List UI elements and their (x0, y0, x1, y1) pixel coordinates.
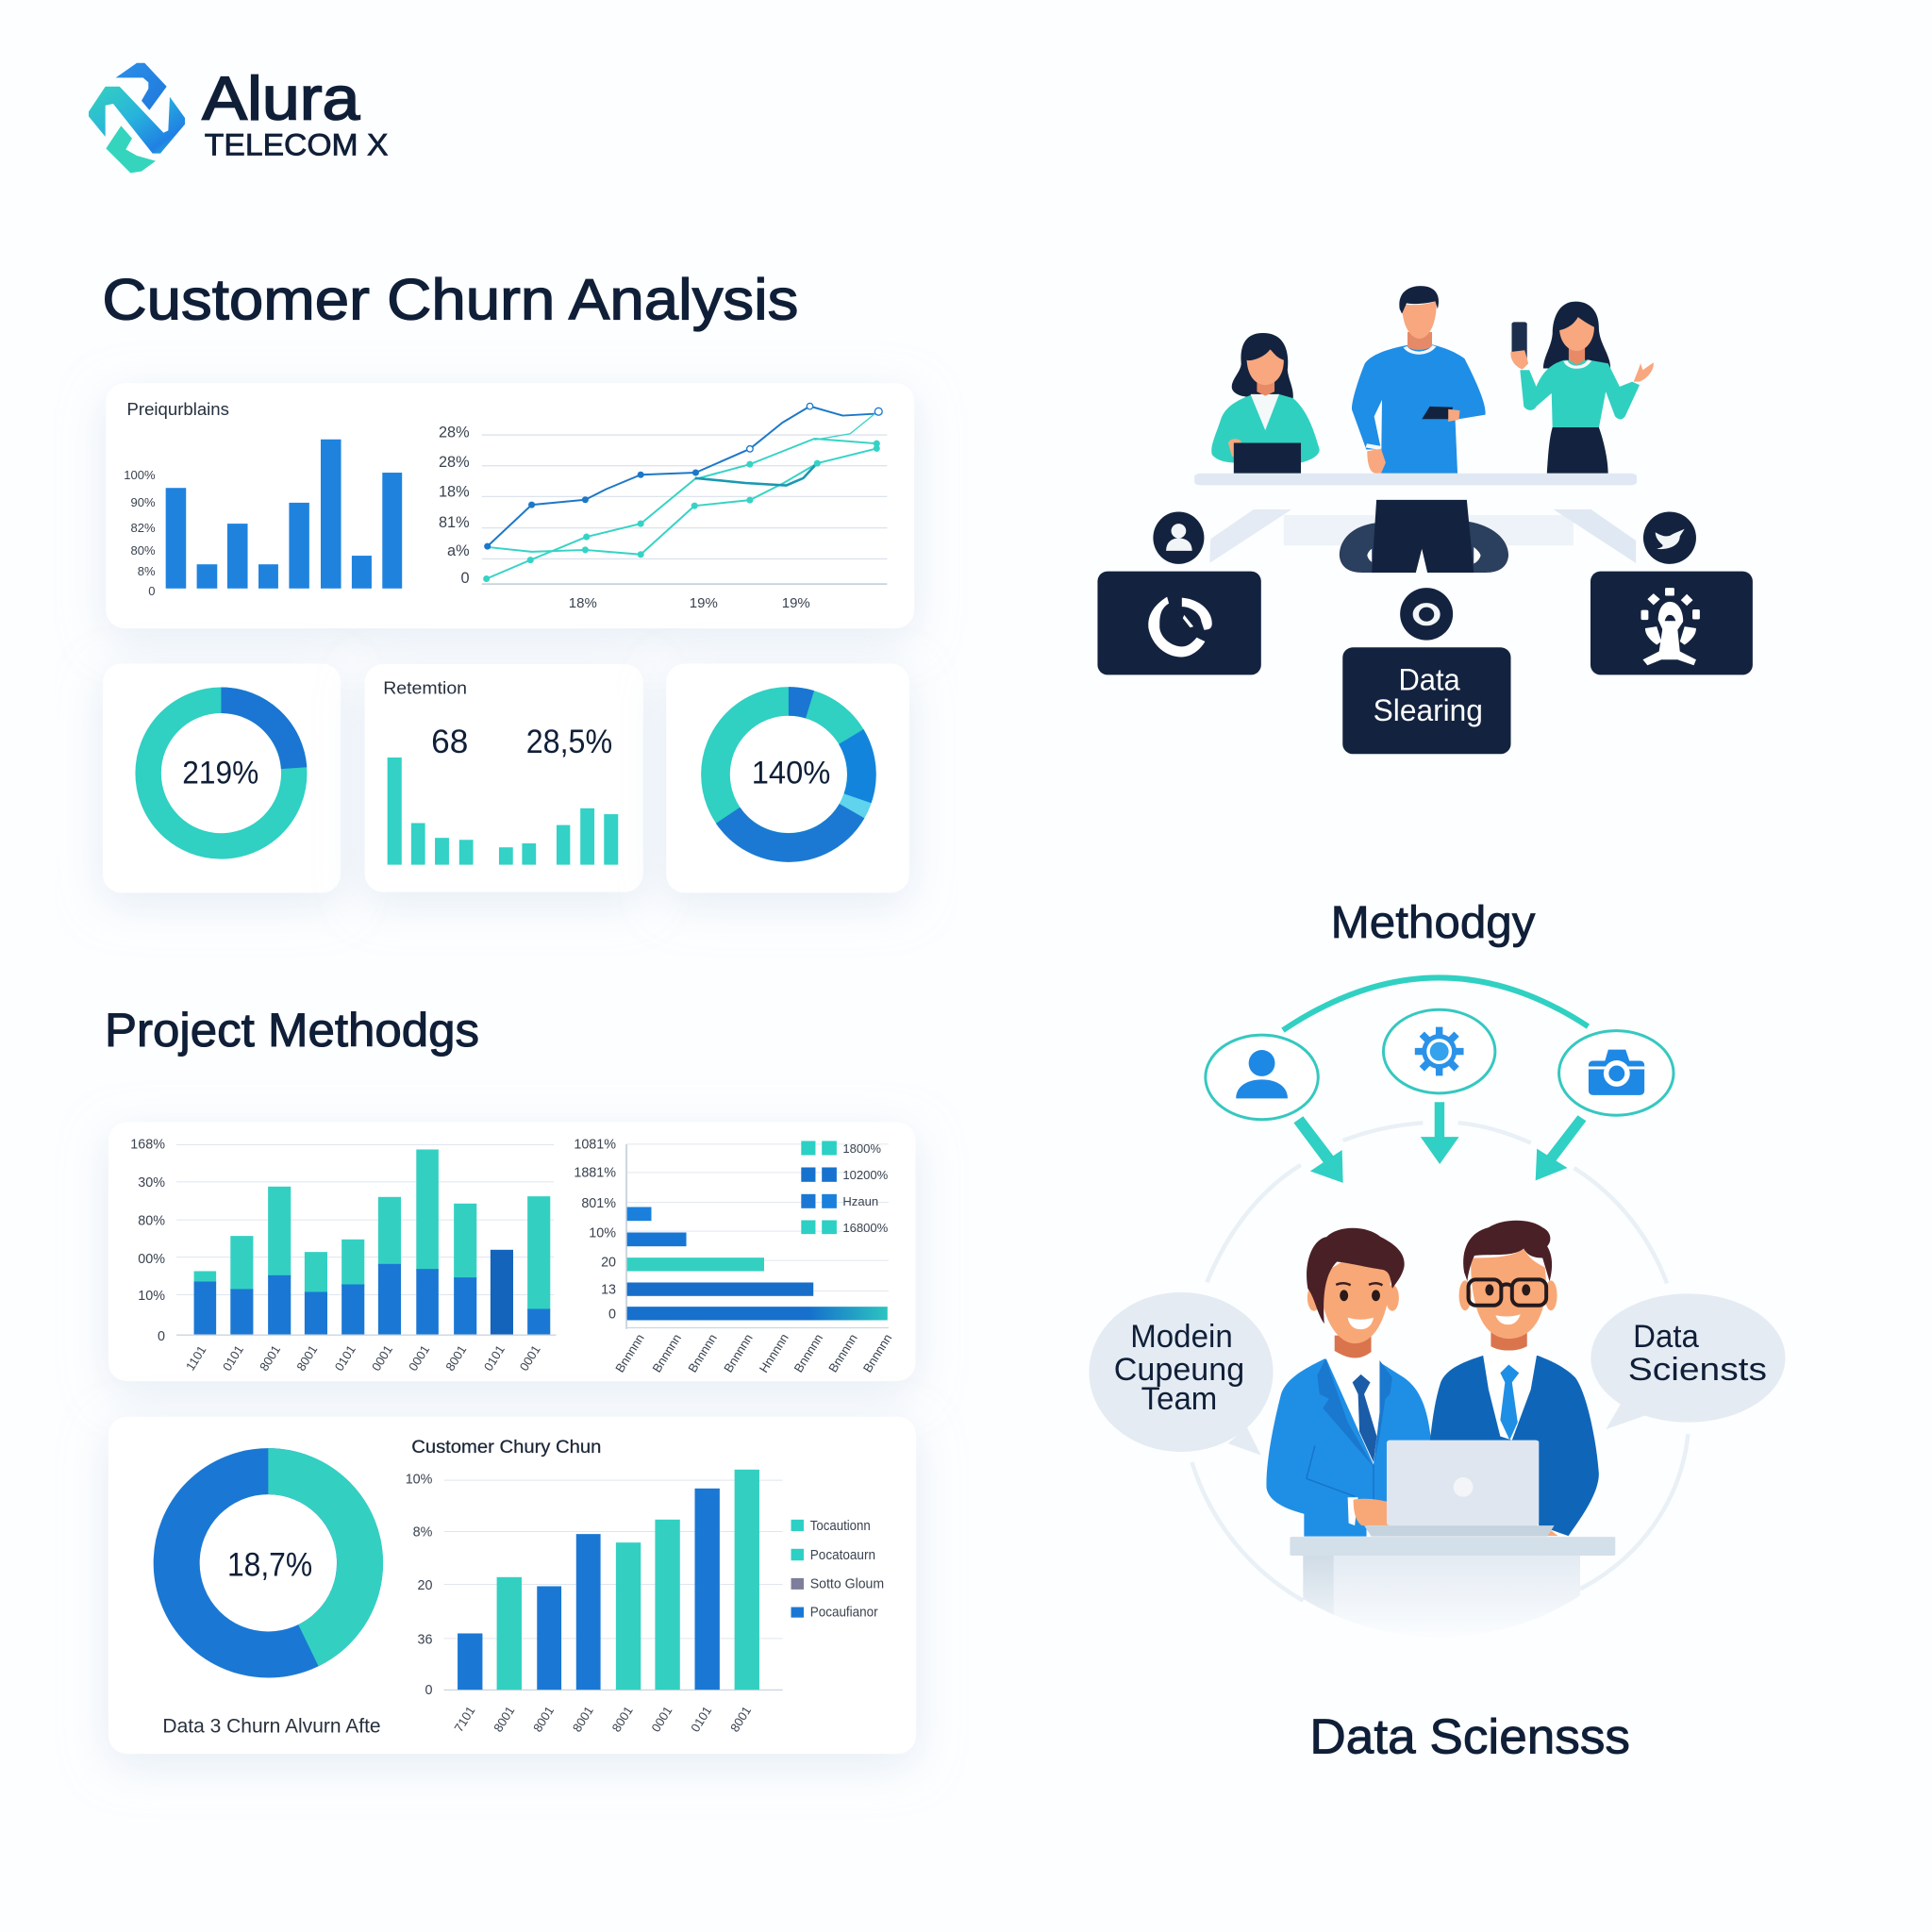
card: lamp icon (1591, 572, 1753, 675)
logo text: Alura (202, 64, 360, 133)
bar chart: 20 (417, 1578, 432, 1593)
card text (1374, 661, 1483, 727)
card: chart icon (1097, 572, 1261, 675)
person: man in blue (1352, 286, 1486, 474)
callout: Data Scientists: Data (1633, 1319, 1699, 1355)
donut value: 219% (182, 756, 258, 791)
donut chart (176, 1472, 360, 1655)
legend: Tocautionn (810, 1519, 871, 1534)
bar chart: 36 (417, 1632, 432, 1647)
stacked bar chart: 0101 (481, 1342, 508, 1374)
donut chart (148, 700, 294, 846)
logo text (202, 64, 389, 162)
bar chart: monthly values: 90% (130, 495, 156, 509)
arc connector (1283, 977, 1588, 1030)
line chart: trend lines: 19% (690, 595, 718, 611)
heading: Customer Churn Analysis: Customer Churn Analysis (102, 267, 798, 332)
stacked bar chart (130, 1137, 556, 1374)
laptop (1348, 1441, 1558, 1537)
legend (801, 1141, 889, 1235)
heading: Data Sciensss: Data Sciensss (1309, 1710, 1630, 1765)
person: woman with phone (1510, 302, 1654, 474)
legend: Pocatoaurn (810, 1548, 875, 1563)
stacked bar chart: 0001 (406, 1342, 432, 1374)
stacked bar chart: 8001 (293, 1342, 320, 1374)
donut value: 140% (752, 756, 830, 791)
callout: Modein Cupeung Team: Modein (1130, 1319, 1233, 1355)
legend: 1800% (842, 1141, 881, 1156)
icon: logo mark (89, 63, 185, 173)
bar chart: monthly values: 80% (130, 543, 156, 558)
panel: donut 219% (103, 663, 341, 892)
bar chart: 0 (425, 1683, 432, 1698)
stacked bar chart: 00% (138, 1252, 165, 1267)
icon: camera node (1559, 1031, 1674, 1115)
chart title: Customer Chury Chun (411, 1437, 601, 1457)
retention values: 28,5% (526, 724, 612, 760)
legend (791, 1519, 884, 1621)
horizontal bar chart: 1081% (574, 1137, 616, 1152)
callout: Modein Cupeung Team: Cupeung (1114, 1352, 1244, 1388)
stacked bar chart: 80% (138, 1213, 165, 1228)
horizontal bar chart: 20 (601, 1256, 616, 1271)
horizontal bar chart: 801% (581, 1196, 616, 1211)
horizontal bar chart: Bnnnnn (649, 1331, 684, 1374)
donut caption: Data 3 Churn Alvurn Afte (162, 1713, 381, 1737)
legend: 10200% (842, 1168, 889, 1182)
panel: customer churn (108, 1417, 916, 1754)
pedestal (1303, 1556, 1580, 1617)
bar chart: 8001 (570, 1704, 596, 1735)
icon: gear node (1383, 1009, 1495, 1093)
horizontal bar chart: 10% (589, 1225, 616, 1241)
heading: Project Methodgs: Project Methodgs (105, 1004, 479, 1057)
card: data slearing (1342, 647, 1511, 754)
stacked bar chart: 8001 (257, 1342, 283, 1374)
line chart: trend lines (439, 403, 887, 611)
bar chart: monthly values: 0 (148, 584, 156, 598)
bar chart: 8001 (491, 1704, 517, 1735)
person: right team member (1387, 1221, 1599, 1536)
card text: Slearing (1374, 692, 1483, 727)
bar chart: monthly values: 8% (138, 564, 156, 578)
line chart: trend lines: 0 (461, 570, 470, 587)
arrow: left (1293, 1116, 1343, 1183)
stacked bar chart: 0101 (332, 1342, 358, 1374)
line chart: trend lines: 28% (439, 454, 470, 471)
panel: overview charts (106, 383, 914, 628)
stacked bar chart: 168% (130, 1137, 165, 1152)
bar chart: monthly values (124, 440, 402, 598)
logo text: TELECOM X (205, 127, 389, 162)
illustration: methodology and data science team (1089, 977, 1785, 1639)
horizontal bar chart: Bnnnnn (860, 1331, 894, 1374)
bar chart: monthly values: 100% (124, 468, 156, 482)
arrow: right (1536, 1115, 1586, 1180)
person: left team member (1266, 1228, 1431, 1537)
panel: retention (365, 664, 643, 892)
line chart: trend lines: 81% (439, 514, 470, 531)
callout: Modein Cupeung Team (1089, 1292, 1274, 1456)
horizontal bar chart (574, 1137, 894, 1375)
icon: bird badge (1643, 511, 1696, 564)
line chart: trend lines: 18% (439, 483, 470, 500)
bar chart: monthly values: 82% (130, 521, 156, 535)
card text: Data (1398, 661, 1461, 696)
logo: Alura Telecom X (89, 63, 389, 173)
horizontal bar chart: Bnnnnn (721, 1331, 756, 1374)
callout: Modein Cupeung Team: Team (1141, 1381, 1217, 1417)
horizontal bar chart: Bnnnnn (825, 1331, 860, 1374)
horizontal bar chart: Hnnnnn (757, 1331, 791, 1375)
line chart: trend lines: 28% (439, 425, 470, 441)
icon: target badge (1400, 588, 1453, 641)
illustration: team and data channels (1097, 286, 1753, 754)
arrow: center (1421, 1102, 1459, 1164)
retention title: Retemtion (383, 677, 467, 697)
line chart: trend lines: a% (447, 542, 470, 559)
legend: Sotto Gloum (810, 1577, 884, 1592)
legend: Pocaufianor (810, 1606, 878, 1621)
bar chart: 8001 (727, 1704, 754, 1735)
legend: Hzaun (842, 1194, 878, 1208)
heading: Methodgy: Methodgy (1331, 897, 1536, 948)
table supports (1209, 509, 1636, 563)
person: woman with laptop (1211, 333, 1320, 474)
bar chart: 8001 (530, 1704, 557, 1735)
stacked bar chart: 0001 (517, 1342, 543, 1374)
background ring (1191, 1123, 1688, 1601)
panel: stacked and horizontal bars (108, 1122, 915, 1381)
donut value: 18,7% (227, 1547, 312, 1584)
horizontal bar chart: 13 (601, 1282, 616, 1297)
bar chart: 0001 (648, 1704, 675, 1735)
retention bar chart (388, 758, 618, 865)
retention values: 68 (431, 724, 468, 760)
bar chart (406, 1470, 783, 1735)
legend: 16800% (842, 1221, 889, 1235)
line chart: trend lines: 19% (782, 595, 810, 611)
tabletop (1194, 474, 1637, 485)
bar chart: 8001 (609, 1704, 636, 1735)
horizontal bar chart: Bnnnnn (685, 1331, 720, 1374)
bar chart: 8% (413, 1525, 433, 1541)
person legs and chair (1340, 500, 1508, 573)
stacked bar chart: 8001 (442, 1342, 469, 1374)
icon: person badge (1153, 511, 1204, 564)
panel: donut 140% (666, 663, 909, 892)
donut chart (715, 701, 861, 847)
stacked bar chart: 0101 (220, 1342, 246, 1374)
chart title: Preiqurblains (127, 399, 229, 419)
horizontal bar chart: 0 (608, 1307, 616, 1323)
stacked bar chart: 30% (138, 1175, 165, 1191)
horizontal bar chart: Bnnnnn (791, 1331, 825, 1374)
horizontal bar chart: 1881% (574, 1165, 616, 1180)
callout: Data Scientists (1591, 1293, 1785, 1429)
stacked bar chart: 0 (158, 1329, 165, 1344)
desk (1290, 1537, 1615, 1556)
stacked bar chart: 1101 (183, 1343, 209, 1373)
stacked bar chart: 10% (138, 1289, 165, 1304)
bar chart: 10% (406, 1473, 433, 1488)
horizontal bar chart: Bnnnnn (612, 1331, 647, 1374)
bar chart: 0101 (688, 1704, 714, 1735)
icon: person node (1206, 1035, 1318, 1120)
retention values (431, 724, 612, 760)
bar chart: 7101 (451, 1704, 478, 1735)
line chart: trend lines: 18% (569, 595, 597, 611)
callout: Data Scientists: Sciensts (1628, 1352, 1767, 1388)
stacked bar chart: 0001 (369, 1342, 395, 1374)
